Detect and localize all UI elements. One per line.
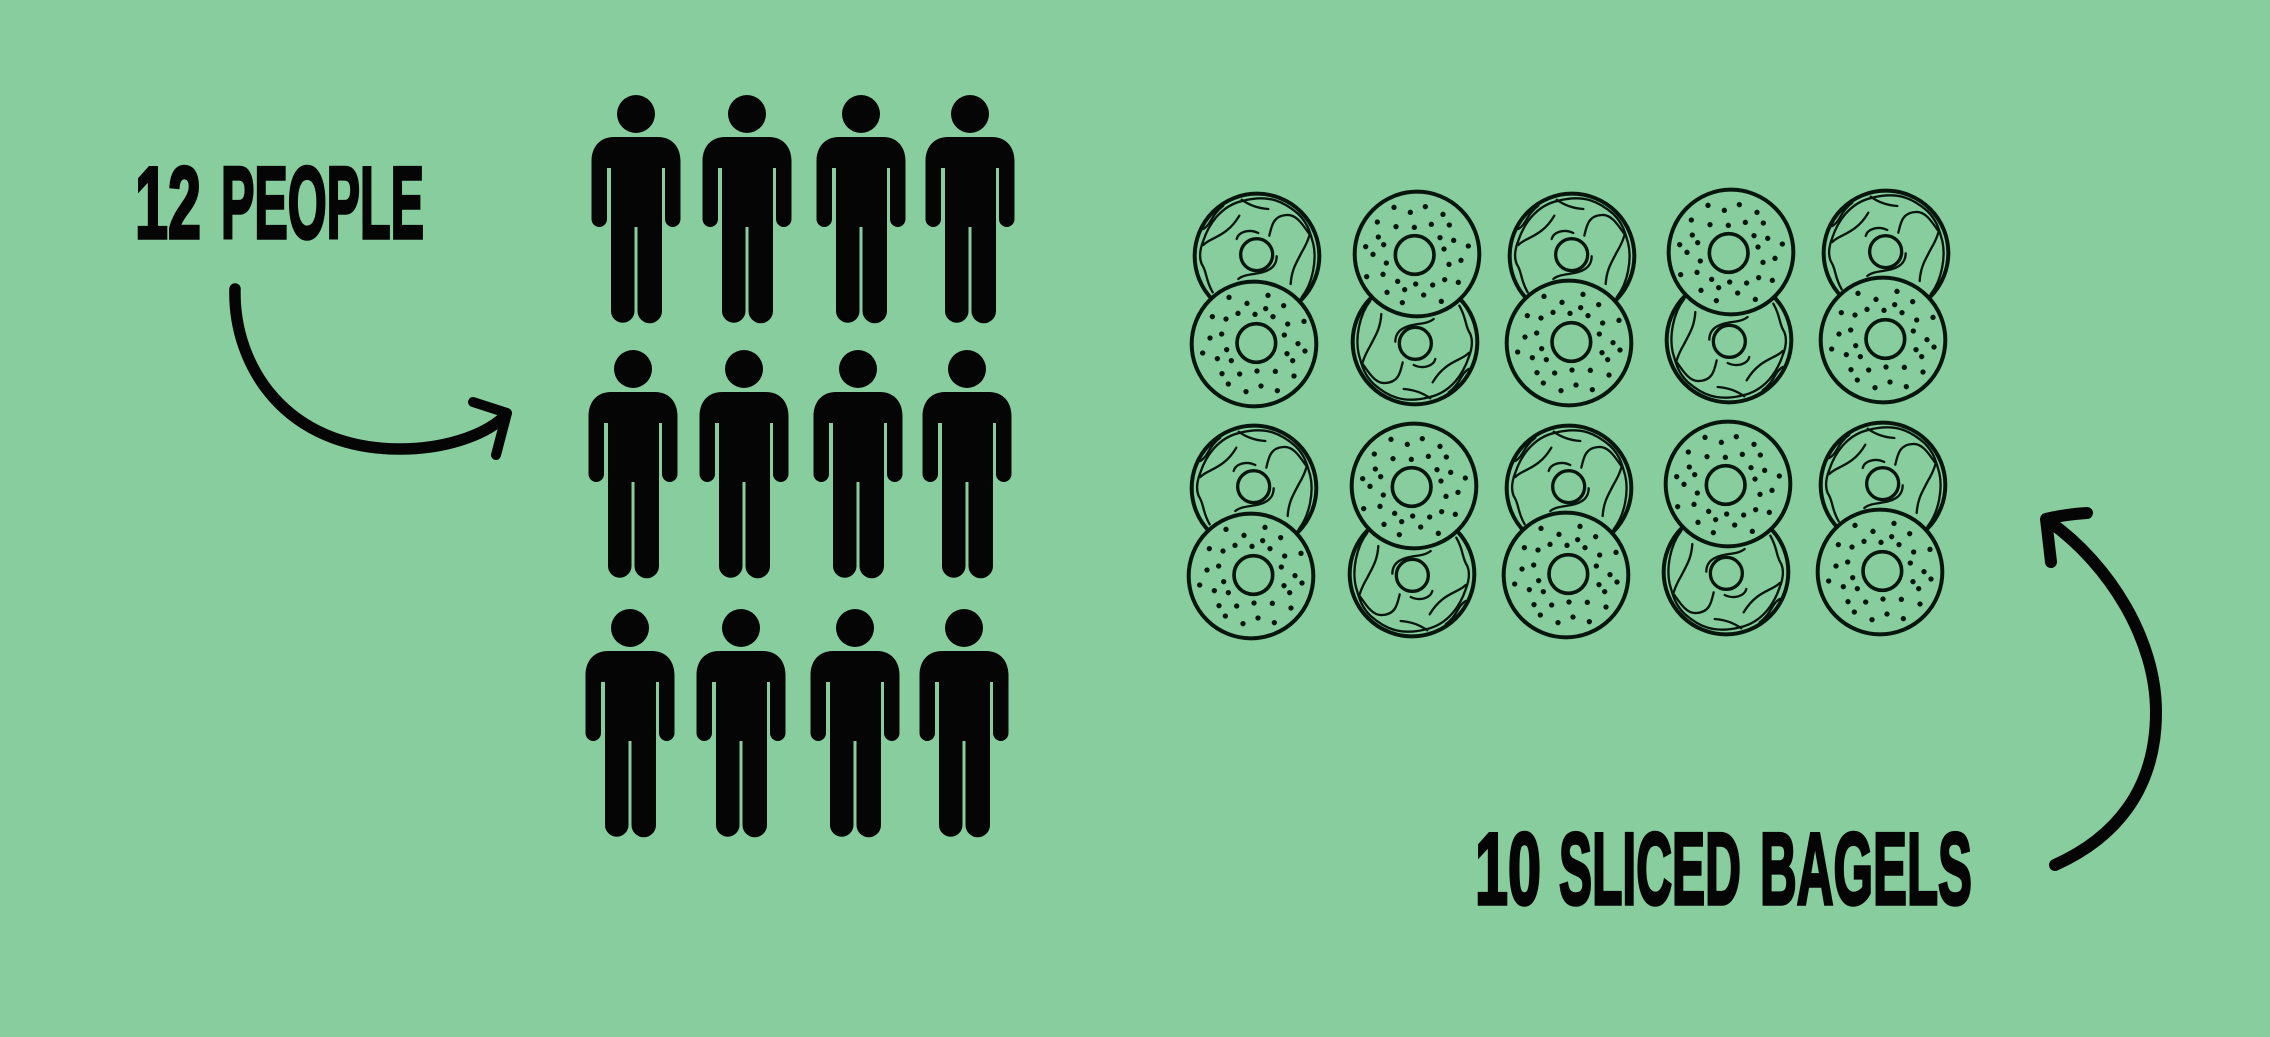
icon: sliced bagel (1818, 423, 1945, 634)
icon: person (586, 609, 674, 837)
arrow: from 10 sliced bagels to the bagel icons (2046, 513, 2156, 865)
icon: person (922, 350, 1012, 578)
icon: person (810, 609, 900, 837)
icon: sliced bagel (1821, 191, 1948, 402)
people row 1 (592, 95, 1014, 323)
heading: 12 people: 12 (135, 146, 201, 260)
heading: 10 sliced bagels: SLICED (1559, 812, 1741, 926)
bagels row 2 (1189, 422, 1945, 638)
icon: sliced bagel (1192, 194, 1319, 406)
bagels grid (1189, 190, 1948, 638)
bagels row 1 (1192, 190, 1948, 406)
icon: sliced bagel (1353, 192, 1479, 404)
icon: sliced bagel (1507, 194, 1634, 405)
arrow: from 12 people to the people icons (235, 289, 507, 455)
icon: person (926, 95, 1014, 323)
icon: person (592, 95, 680, 323)
icon: person (696, 609, 786, 837)
icon: person (920, 609, 1008, 837)
icon: sliced bagel (1664, 422, 1790, 634)
icon: sliced bagel (1350, 424, 1476, 636)
heading: 12 people (135, 146, 424, 260)
icon: person (700, 350, 788, 578)
people grid (586, 95, 1014, 837)
icon: sliced bagel (1667, 190, 1793, 402)
icon: person (816, 95, 906, 323)
icon: sliced bagel (1504, 426, 1631, 637)
text: BAGELS (1760, 812, 1972, 926)
people row 3 (586, 609, 1008, 837)
people row 2 (588, 350, 1012, 578)
icon: person (814, 350, 902, 578)
icon: person (588, 350, 678, 578)
icon: person (702, 95, 792, 323)
text: PEOPLE (221, 146, 424, 260)
icon: sliced bagel (1189, 426, 1316, 638)
heading: 10 sliced bagels: 10 (1475, 812, 1541, 926)
